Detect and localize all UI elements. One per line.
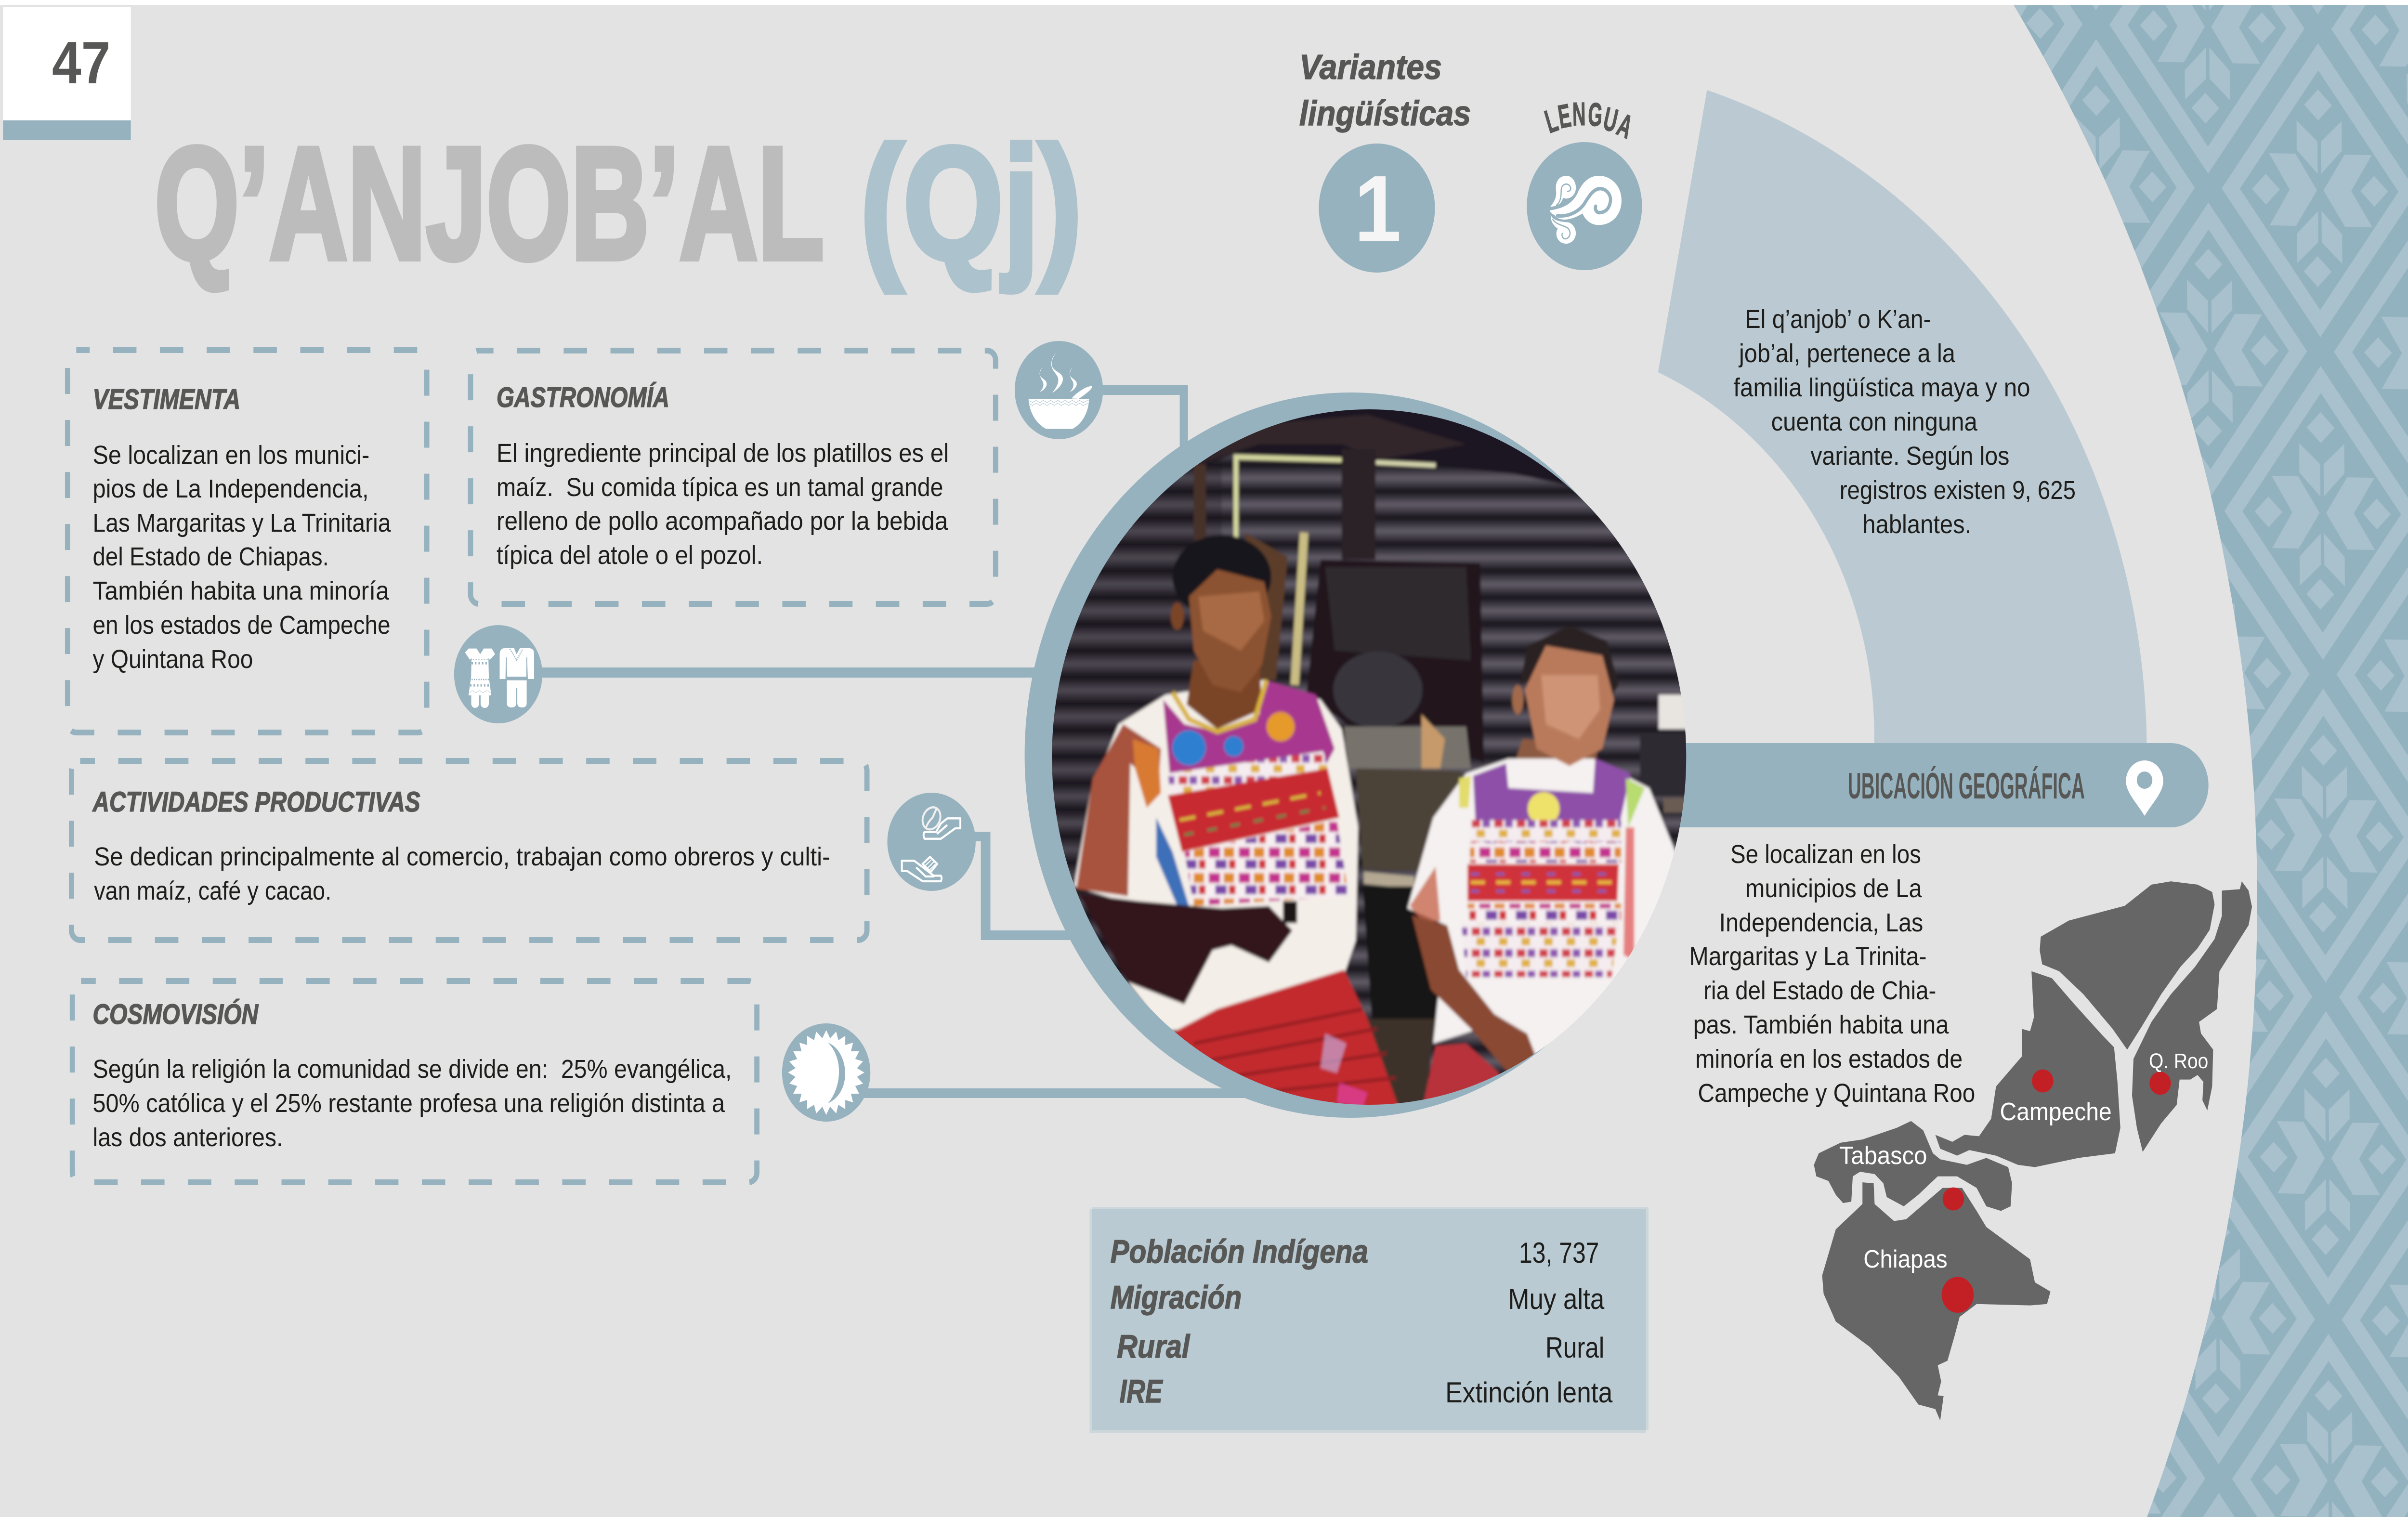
lengua label: A xyxy=(1613,106,1637,146)
top white strip xyxy=(0,0,2408,5)
geographic description: Se localizan en los xyxy=(1730,840,1921,869)
panel: lengua description: registros existen 9, 625 xyxy=(1840,476,2076,505)
icon: sun and moon xyxy=(782,1023,870,1122)
geographic location bar xyxy=(1646,743,2209,827)
geographic description: pas. También habita una xyxy=(1693,1010,1949,1039)
map of southeast Mexico: Q. Roo xyxy=(2149,1049,2208,1072)
panel: vestimenta: VESTIMENTA xyxy=(93,383,240,415)
panel: cosmovisión: las dos anteriores. xyxy=(93,1123,283,1152)
icon: soup bowl xyxy=(1015,341,1103,439)
variants count badge: 1 xyxy=(1354,156,1401,262)
panel: vestimenta xyxy=(67,350,427,732)
panel: actividades productivas: Se dedican principalmente al comercio, trabajan como obreros y culti- xyxy=(94,842,830,871)
map of southeast Mexico xyxy=(1814,881,2252,1421)
right woman xyxy=(1515,737,1599,760)
lengua label: N xyxy=(1572,95,1586,132)
map region: Chiapas xyxy=(1822,1182,2051,1421)
map of southeast Mexico: Chiapas xyxy=(1863,1245,1948,1273)
lengua label: L xyxy=(1541,101,1562,140)
panel: lengua description: variante. Según los xyxy=(1810,442,2009,471)
panel: vestimenta: Se localizan en los munici- xyxy=(93,441,369,470)
connector lines xyxy=(537,385,1252,1098)
page number tab xyxy=(3,7,131,140)
geographic description: Margaritas y La Trinita- xyxy=(1689,942,1927,971)
variants count badge xyxy=(1319,144,1435,273)
title: (Qj) xyxy=(861,114,1082,294)
panel: lengua description: job’al, pertenece a la xyxy=(1738,339,1955,368)
panel: gastronomía: maíz. Su comida típica es un tamal grande xyxy=(497,473,943,502)
panel: statistics table: Muy alta xyxy=(1508,1283,1604,1316)
panel: gastronomía xyxy=(471,351,995,604)
photo ring xyxy=(1025,392,1677,1118)
panel: vestimenta: También habita una minoría xyxy=(93,576,389,605)
geographic description: Campeche y Quintana Roo xyxy=(1698,1079,1975,1108)
panel: statistics table: Población Indígena xyxy=(1111,1233,1368,1270)
woven pattern background xyxy=(1950,5,2408,1517)
panel: gastronomía: típica del atole o el pozol. xyxy=(497,541,763,570)
panel: actividades productivas xyxy=(71,761,867,940)
icon: location pin xyxy=(2126,760,2163,816)
panel: statistics table: IRE xyxy=(1120,1373,1163,1410)
icon: lengua swirl xyxy=(1527,142,1642,270)
panel: lengua description xyxy=(1658,90,2147,744)
panel: cosmovisión xyxy=(72,981,757,1182)
panel: vestimenta: Las Margaritas y La Trinitaria xyxy=(93,509,391,537)
variantes lingüísticas heading: lingüísticas xyxy=(1299,94,1471,133)
geographic description: Independencia, Las xyxy=(1719,908,1923,937)
geographic location bar: UBICACIÓN GEOGRÁFICA xyxy=(1848,766,2085,807)
map region: Quintana Roo xyxy=(2132,881,2252,1152)
panel: lengua description: cuenta con ninguna xyxy=(1771,407,1977,436)
panel: cosmovisión: Según la religión la comunidad se divide en: 25% evangélica, xyxy=(93,1055,732,1084)
panel: cosmovisión: 50% católica y el 25% restante profesa una religión distinta a xyxy=(93,1089,725,1118)
photo: two women in embroidered huipiles xyxy=(1052,409,1687,1105)
icon: clothing xyxy=(454,625,542,723)
panel: lengua description: hablantes. xyxy=(1862,510,1971,539)
panel: statistics table: Extinción lenta xyxy=(1445,1376,1613,1409)
panel: gastronomía: El ingrediente principal de los platillos es el xyxy=(497,439,949,468)
page number tab: 47 xyxy=(52,29,110,96)
geographic description: ria del Estado de Chia- xyxy=(1703,976,1936,1005)
map markers xyxy=(1942,1070,2171,1313)
panel: lengua description: familia lingüística maya y no xyxy=(1733,373,2030,402)
panel: vestimenta: en los estados de Campeche xyxy=(93,611,391,640)
map region: Campeche xyxy=(1936,971,2120,1167)
geographic description: municipios de La xyxy=(1745,874,1922,903)
lengua label: E xyxy=(1556,97,1573,135)
geographic description: minoría en los estados de xyxy=(1695,1045,1963,1073)
variantes lingüísticas heading xyxy=(1299,48,1471,133)
panel: vestimenta: del Estado de Chiapas. xyxy=(93,542,329,571)
panel: cosmovisión: COSMOVISIÓN xyxy=(93,998,259,1030)
panel: vestimenta: pios de La Independencia, xyxy=(93,474,369,503)
geographic description xyxy=(1689,840,1975,1108)
variantes lingüísticas heading: Variantes xyxy=(1299,48,1442,87)
map of southeast Mexico: Tabasco xyxy=(1839,1142,1927,1170)
left woman xyxy=(1074,680,1358,1031)
panel: vestimenta: y Quintana Roo xyxy=(93,645,253,674)
title: Q’ANJOB’AL xyxy=(155,114,824,292)
icon: hands with seeds xyxy=(887,793,976,891)
lengua label: G xyxy=(1587,95,1604,133)
panel: statistics table: Rural xyxy=(1117,1328,1191,1365)
panel: actividades productivas: ACTIVIDADES PRODUCTIVAS xyxy=(92,786,420,818)
panel: statistics table xyxy=(1090,1207,1649,1433)
panel: gastronomía: relleno de pollo acompañado por la bebida xyxy=(497,507,948,536)
panel: lengua description: El q’anjob’ o K’an- xyxy=(1745,305,1931,334)
panel: statistics table: Migración xyxy=(1111,1279,1242,1316)
panel: gastronomía: GASTRONOMÍA xyxy=(497,381,669,413)
map region: Yucatán xyxy=(2040,881,2214,1049)
panel: statistics table: Rural xyxy=(1545,1332,1604,1364)
map of southeast Mexico: Campeche xyxy=(2000,1098,2112,1126)
lengua label: U xyxy=(1600,100,1621,139)
lengua label xyxy=(1541,95,1637,146)
panel: actividades productivas: van maíz, café y cacao. xyxy=(94,876,331,905)
map region: Tabasco xyxy=(1814,1121,2012,1211)
panel: statistics table: 13, 737 xyxy=(1519,1237,1599,1269)
